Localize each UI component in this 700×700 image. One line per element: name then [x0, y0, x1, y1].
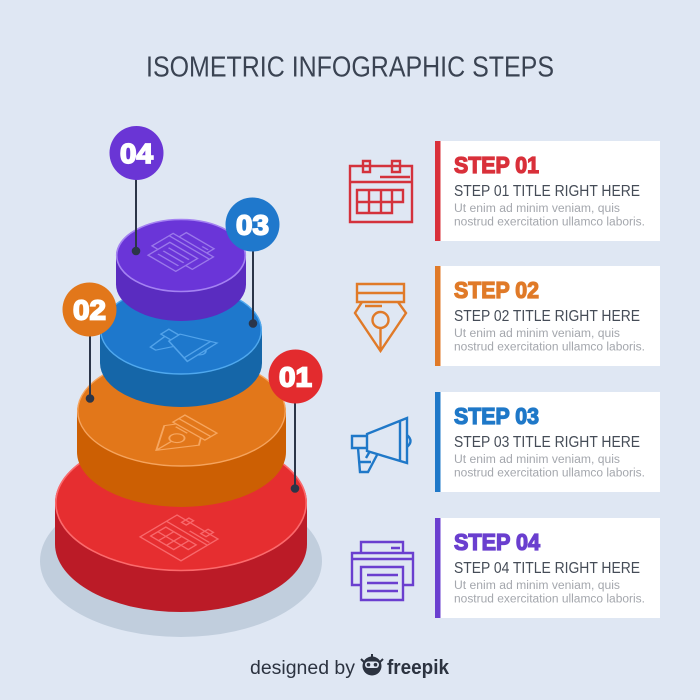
- heading: step 02: STEP 02: [454, 277, 539, 303]
- body: step 03: [454, 454, 645, 480]
- footer credit: designed by: [250, 657, 355, 679]
- marker 03: 03: [236, 210, 269, 240]
- marker 01: [268, 350, 322, 493]
- marker 03: [226, 198, 280, 328]
- icon: calendar: [350, 161, 412, 222]
- icon: pen nib on orange tier: [139, 414, 218, 460]
- panel: step 03: [435, 392, 660, 492]
- body: step 02: nostrud exercitation ullamco laboris.: [454, 342, 645, 354]
- panel: step 04: [435, 518, 660, 618]
- panel: step 02: [435, 266, 660, 366]
- marker 01: 01: [279, 362, 312, 392]
- heading: step 01: STEP 01: [454, 152, 539, 178]
- marker 02: [62, 282, 116, 403]
- body: step 03: nostrud exercitation ullamco laboris.: [454, 468, 645, 480]
- title: ISOMETRIC INFOGRAPHIC STEPS: [146, 52, 554, 84]
- body: step 01: Ut enim ad minim veniam, quis: [454, 203, 620, 215]
- icon: printer: [352, 542, 413, 600]
- icon: freepik logo: [361, 654, 383, 676]
- icon: printer on purple tier: [142, 229, 221, 275]
- body: step 02: [454, 328, 645, 354]
- heading: step 03: STEP 03: [454, 403, 539, 429]
- body: step 03: Ut enim ad minim veniam, quis: [454, 454, 620, 466]
- subtitle: step 01: STEP 01 TITLE RIGHT HERE: [454, 183, 640, 200]
- body: step 01: nostrud exercitation ullamco laboris.: [454, 216, 645, 228]
- cylinder tier 03: blue: [100, 286, 262, 407]
- cylinder tier 01: red: [55, 435, 307, 612]
- subtitle: step 04: STEP 04 TITLE RIGHT HERE: [454, 560, 640, 577]
- marker 02: 02: [73, 294, 106, 326]
- subtitle: step 02: STEP 02 TITLE RIGHT HERE: [454, 308, 640, 325]
- icon: megaphone: [352, 418, 410, 472]
- ground shadow: [40, 485, 322, 637]
- marker 04: [110, 126, 164, 255]
- cylinder tier 02: orange: [77, 356, 286, 507]
- icon: calendar on red tier: [140, 513, 221, 561]
- marker 04: 04: [120, 138, 153, 169]
- footer credit: freepik: [387, 657, 450, 679]
- subtitle: step 03: STEP 03 TITLE RIGHT HERE: [454, 434, 640, 451]
- body: step 01: [454, 203, 645, 228]
- icon: pen nib: [355, 284, 406, 351]
- body: step 04: nostrud exercitation ullamco laboris.: [454, 594, 645, 606]
- footer credit: [250, 654, 450, 679]
- heading: step 04: STEP 04: [454, 529, 540, 555]
- body: step 04: [454, 580, 645, 606]
- body: step 02: Ut enim ad minim veniam, quis: [454, 328, 620, 340]
- cylinder tier 04: purple: [116, 219, 246, 321]
- body: step 04: Ut enim ad minim veniam, quis: [454, 580, 620, 592]
- icon: megaphone on blue tier: [145, 322, 219, 366]
- panel: step 01: [435, 141, 660, 241]
